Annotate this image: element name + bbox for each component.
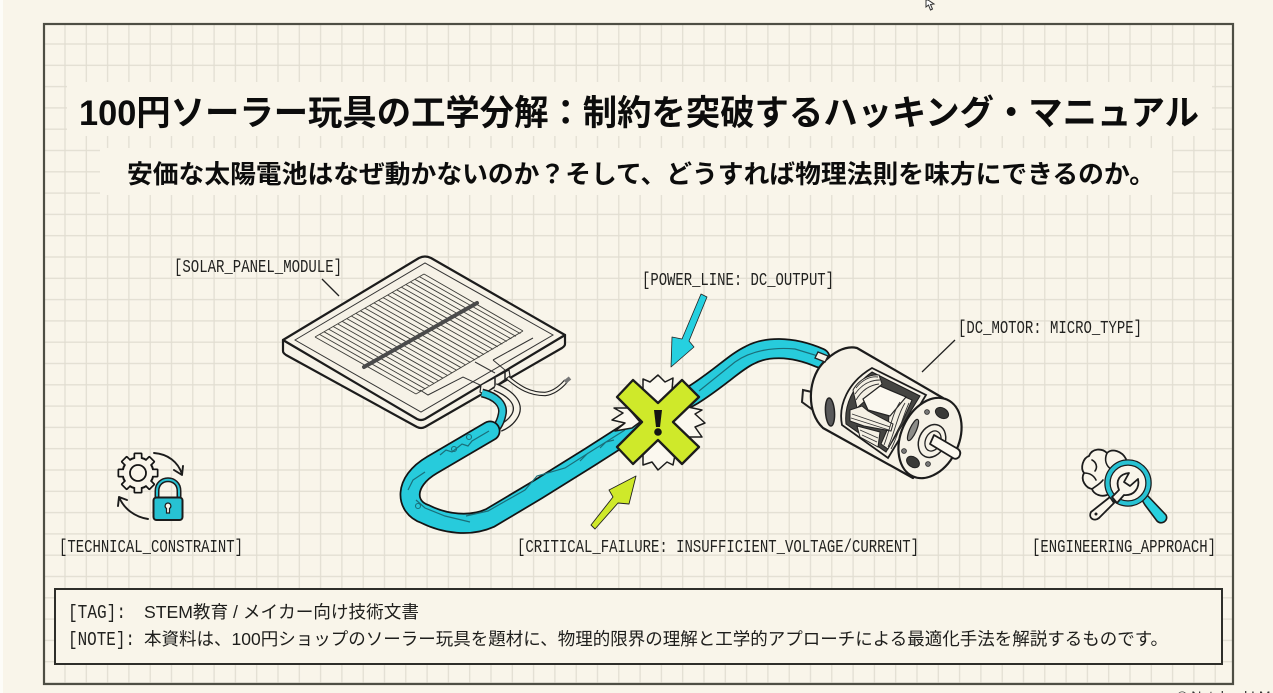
busbar <box>364 303 477 367</box>
tag key: [TAG]: <box>68 602 126 624</box>
motor upper coil <box>853 375 882 408</box>
icon: exclamation mark <box>654 410 662 436</box>
motor rear tab <box>802 390 813 410</box>
leader line: dc motor <box>922 340 955 372</box>
illustration: failure X mark <box>617 380 699 464</box>
note box <box>55 589 1222 664</box>
subtitle: 安価な太陽電池はなぜ動かないのか？そして、どうすれば物理法則を味方にできるのか。 <box>127 161 1155 189</box>
label: technical constraint: [TECHNICAL_CONSTRAINT] <box>59 538 243 558</box>
motor rotor <box>863 386 906 416</box>
label: solar panel module: [SOLAR_PANEL_MODULE] <box>174 258 342 278</box>
motor lower block <box>857 426 880 447</box>
note value: 本資料は、100円ショップのソーラー玩具を題材に、物理的限界の理解と工学的アプローチによる最適化手法を解説するものです。 <box>144 629 1168 649</box>
motor right coil <box>881 397 912 449</box>
arrow: yellow pointing to failure <box>591 476 636 529</box>
magnifier lens <box>1108 462 1148 504</box>
label: engineering approach: [ENGINEERING_APPROACH] <box>1032 538 1216 558</box>
lock <box>157 480 179 498</box>
magnifier handle <box>1142 495 1167 523</box>
motor rear terminal <box>815 352 828 362</box>
terminals <box>480 370 510 394</box>
solar cell hatch lines <box>315 274 523 394</box>
motor front face <box>886 388 974 488</box>
label: critical failure: [CRITICAL_FAILURE: INSUFFICIENT_VOLTAGE/CURRENT] <box>517 538 919 558</box>
circuit traces <box>408 348 818 522</box>
illustration: solar panel <box>283 256 565 428</box>
motor window interior <box>846 372 920 452</box>
contact pads <box>420 338 533 395</box>
motor shaft <box>930 435 960 459</box>
illustration: thin wires from panel <box>482 378 570 428</box>
tag value: STEM教育 / メイカー向け技術文書 <box>144 602 419 622</box>
gear <box>118 452 158 494</box>
brain <box>1082 450 1126 496</box>
motor body <box>811 347 943 478</box>
illustration: cyan power cable <box>408 348 820 523</box>
icon: gear, lock and cycle arrows <box>118 452 183 520</box>
motor lower coil <box>850 406 893 431</box>
motor vent holes <box>933 405 951 421</box>
leader line: solar panel <box>322 279 339 296</box>
cycle arrows <box>118 453 183 519</box>
motor cutaway window <box>841 368 926 458</box>
illustration: starburst behind failure mark <box>612 375 705 470</box>
icon: brain, wrench and magnifier <box>1082 450 1167 523</box>
illustration: dc motor <box>802 347 974 488</box>
title: 100円ソーラー玩具の工学分解：制約を突破するハッキング・マニュアル <box>79 94 1199 133</box>
icon: mouse cursor <box>926 0 934 10</box>
wrench handle <box>1090 497 1114 520</box>
wrench head <box>1112 473 1138 503</box>
motor side slot <box>825 398 835 426</box>
label: power line: [POWER_LINE: DC_OUTPUT] <box>642 271 834 291</box>
arrow: cyan pointing to power line <box>671 294 707 367</box>
label: dc motor: [DC_MOTOR: MICRO_TYPE] <box>958 319 1142 339</box>
note key: [NOTE]: <box>68 629 135 651</box>
motor bearing <box>913 420 951 462</box>
motor coil wires <box>851 377 909 449</box>
